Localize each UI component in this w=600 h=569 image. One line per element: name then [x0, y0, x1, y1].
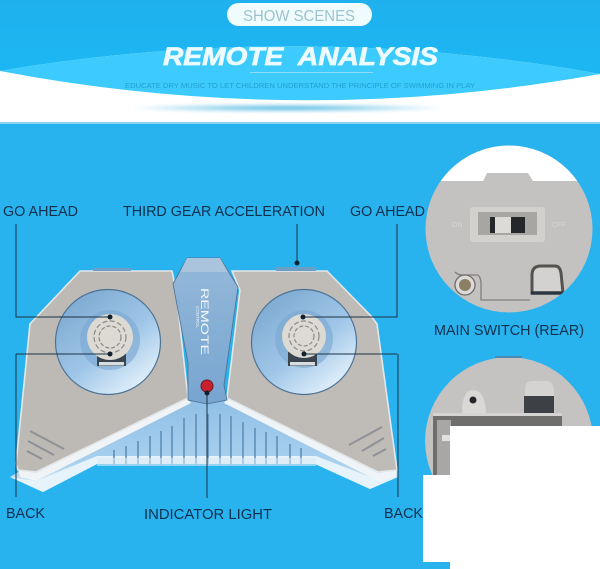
remote grille	[114, 414, 301, 466]
inset: main switch: OFF	[552, 222, 566, 229]
remote control illustration	[10, 258, 398, 492]
remote control illustration: CONTROL	[195, 306, 200, 328]
badge: show scenes	[227, 3, 372, 26]
remote base lower highlight	[10, 456, 398, 492]
label: main switch (rear): MAIN SWITCH (REAR)	[434, 323, 584, 339]
label: go ahead right: GO AHEAD	[350, 204, 425, 220]
white block: upper cover-up	[450, 426, 600, 569]
label: back left: BACK	[6, 506, 45, 522]
top edge detail	[495, 356, 522, 358]
inset: battery compartment	[425, 358, 592, 475]
label: back right: BACK	[384, 506, 423, 522]
inset: main switch	[425, 140, 600, 313]
leader dots	[108, 260, 306, 396]
left vents	[27, 431, 64, 459]
label: go ahead left: GO AHEAD	[3, 204, 78, 220]
right vents	[349, 427, 386, 456]
remote left panel	[16, 271, 188, 472]
label: third gear acceleration: THIRD GEAR ACCELERATION	[123, 204, 325, 220]
title: REMOTE ANALYSIS	[163, 43, 438, 71]
white block: lower cover-up	[423, 475, 450, 562]
remote logo: REMOTE	[198, 288, 210, 355]
remote centre column	[173, 258, 238, 404]
left joystick	[56, 290, 160, 394]
right joystick	[252, 290, 356, 394]
badge: show scenes: SHOW SCENES	[243, 8, 355, 25]
leader lines	[16, 224, 398, 498]
indicator light	[201, 380, 213, 392]
remote base	[10, 398, 398, 492]
remote top buttons	[93, 268, 131, 271]
remote left white bevel	[18, 398, 191, 481]
header banner	[0, 0, 600, 124]
remote right panel	[227, 271, 397, 472]
remote right white bevel	[224, 398, 397, 481]
inset: main switch: ON	[452, 222, 462, 229]
subtitle: EDUCATE DRY MUSIC TO LET CHILDREN UNDERSTAND THE PRINCIPLE OF SWIMMING IN PLAY	[125, 81, 475, 90]
label: indicator light: INDICATOR LIGHT	[144, 507, 272, 523]
